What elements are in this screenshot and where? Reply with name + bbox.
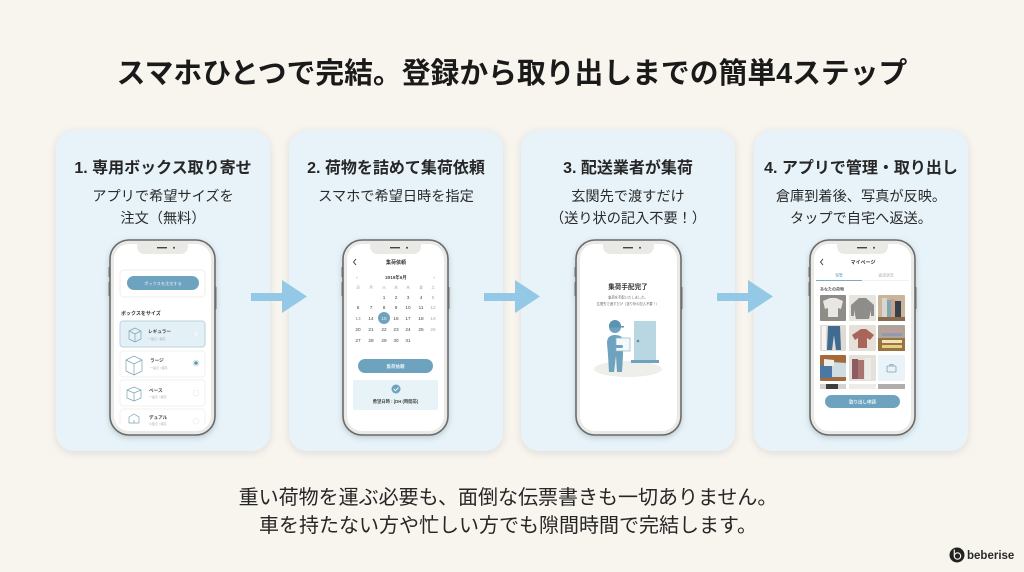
button: order box: ボックスを注文する (144, 280, 182, 287)
calendar: 9 (395, 305, 398, 310)
phone: pickup calendar screen: 集荷依頼 (386, 259, 406, 266)
panel: step 2 (289, 130, 503, 451)
logo: beberise (950, 548, 1014, 562)
text: step 3 description: （送り状の記入不要！） (550, 211, 706, 227)
text: step 3 description: 玄関先で渡すだけ (571, 189, 685, 205)
text: step 3 description (550, 188, 706, 227)
calendar: 5 (432, 295, 435, 300)
heading: step 2: 2. 荷物を詰めて集荷依頼 (307, 160, 485, 177)
calendar: 7 (370, 305, 373, 310)
photo grid (820, 295, 905, 389)
button: request pickup: 集荷依頼 (386, 363, 405, 370)
calendar: 20 (355, 327, 361, 332)
option: large (120, 351, 205, 377)
calendar: 12 (430, 305, 436, 310)
option: dual: 小型元 / 標高 (149, 421, 167, 426)
text: step 4 description: 倉庫到着後、写真が反映。 (776, 189, 946, 205)
button: request pickup (358, 359, 433, 373)
tabs: 保管 (835, 272, 843, 278)
calendar: 10 (405, 305, 411, 310)
option: dual: デュアル (149, 414, 168, 421)
arrow: step 1 to 2 (251, 280, 307, 313)
calendar: 21 (368, 327, 374, 332)
option: wide: 一般元 / 標高 (149, 394, 167, 399)
panel: step 1 (56, 130, 270, 451)
option: large: 一般元 / 標高 (150, 365, 168, 370)
button: request retrieval: 取り出し申請 (849, 398, 876, 406)
calendar: 13 (355, 316, 361, 321)
calendar: 11 (419, 305, 424, 310)
text: step 1 description: 注文（無料） (120, 211, 206, 227)
calendar: 8 (383, 305, 386, 310)
calendar: 月 (369, 284, 373, 290)
calendar: 27 (355, 338, 361, 343)
calendar: 30 (393, 338, 399, 343)
panel: step 4 (754, 130, 968, 451)
option: regular: 一般元 / 標高 (148, 336, 166, 341)
calendar: 2019年6月 (385, 274, 407, 281)
calendar: 23 (393, 327, 399, 332)
calendar: 水 (394, 284, 398, 290)
text: step 1 description (92, 188, 234, 227)
title: スマホひとつで完結。登録から取り出しまでの簡単4ステップ (117, 58, 907, 90)
calendar: 金 (419, 284, 423, 290)
panel: step 3 (521, 130, 735, 451)
phone: my page screen: マイページ (851, 260, 875, 266)
calendar: 26 (430, 327, 436, 332)
phone: pickup complete screen (572, 239, 685, 440)
option: dual (120, 409, 205, 426)
footer text: 車を持たない方や忙しい方でも隙間時間で完結します。 (259, 515, 757, 537)
calendar: 土 (431, 284, 435, 290)
footer text: 重い荷物を運ぶ必要も、面倒な伝票書きも一切ありません。 (239, 487, 777, 509)
calendar: 18 (418, 316, 424, 321)
calendar: 14 (368, 316, 374, 321)
text: step 4 description: タップで自宅へ返送。 (790, 211, 932, 227)
calendar: 6 (357, 305, 360, 310)
heading: step 1: 1. 専用ボックス取り寄せ (74, 160, 252, 177)
calendar: 17 (405, 316, 411, 321)
calendar: 火 (382, 284, 386, 290)
arrow: step 2 to 3 (484, 280, 540, 313)
logo: beberise: beberise (967, 550, 1014, 562)
option: large: ラージ (150, 358, 164, 364)
footer text (239, 487, 777, 537)
phone: my page screen (806, 239, 919, 440)
phone: box order screen: ボックスをサイズ (121, 310, 161, 317)
option: wide (120, 380, 205, 406)
calendar: 15 (381, 316, 387, 321)
confirmation panel: 希望日時 : [DH (時間帯) (373, 398, 419, 405)
calendar: 19 (430, 316, 436, 321)
calendar: 25 (418, 327, 424, 332)
text: step 2 description: スマホで希望日時を指定 (318, 189, 474, 205)
phone: pickup complete screen: 集荷を手配いたしました。 (608, 294, 648, 300)
calendar: 28 (368, 338, 374, 343)
calendar: 日 (356, 286, 360, 290)
calendar: › (433, 275, 435, 280)
button: order box (127, 276, 199, 290)
tabs: 返送状況 (878, 272, 894, 278)
phone: pickup complete screen: 集荷手配完了 (608, 282, 648, 291)
button: request retrieval (825, 395, 900, 408)
calendar: 1 (383, 295, 386, 300)
confirmation panel (353, 380, 438, 410)
calendar: 3 (407, 295, 410, 300)
heading: step 4: 4. アプリで管理・取り出し (764, 160, 958, 177)
arrow: step 3 to 4 (717, 280, 773, 313)
calendar: 4 (420, 295, 423, 300)
calendar: 24 (405, 327, 411, 332)
calendar: 29 (381, 338, 387, 343)
option: wide: ベース (149, 388, 163, 394)
option: regular: レギュラー (148, 329, 171, 335)
option: regular (120, 321, 205, 347)
calendar: ‹ (356, 275, 358, 280)
phone: box order screen (106, 239, 219, 440)
illustration: courier at door (594, 320, 662, 377)
phone: pickup calendar screen (339, 239, 452, 440)
calendar: 22 (381, 327, 387, 332)
calendar: 16 (393, 316, 399, 321)
text: step 1 description: アプリで希望サイズを (92, 189, 234, 205)
heading: step 3: 3. 配送業者が集荷 (563, 160, 693, 177)
calendar: 31 (405, 338, 411, 343)
tabs (816, 272, 909, 281)
phone: pickup complete screen: 玄関先で渡すだけ（送り状の記入不要！） (597, 301, 659, 306)
text: step 4 description (776, 188, 946, 227)
calendar (355, 274, 436, 343)
calendar: 2 (395, 295, 398, 300)
calendar: 木 (406, 284, 410, 290)
phone: my page screen: あなたの荷物 (820, 286, 844, 292)
